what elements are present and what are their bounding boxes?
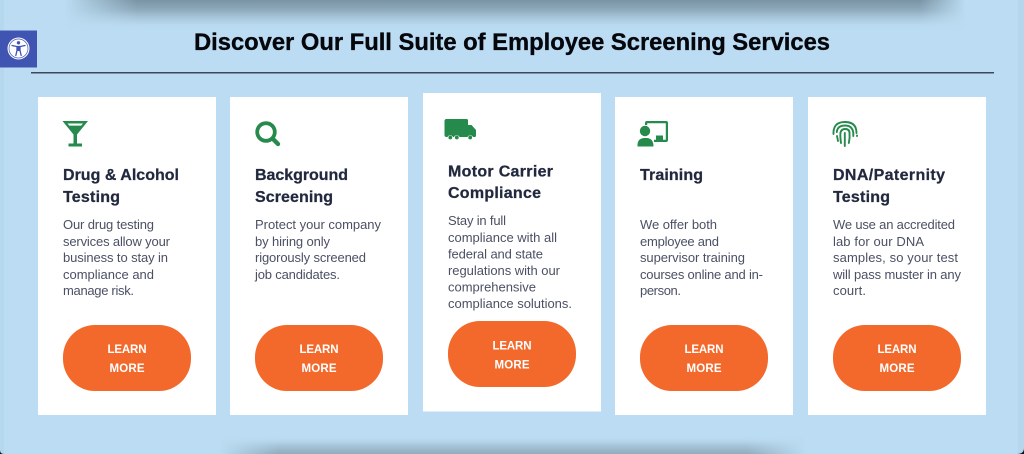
heading: Motor Carrier [448, 164, 553, 180]
button: learn more: MORE [686, 363, 722, 375]
text block: business to stay in [63, 250, 168, 265]
text block: regulations with our [448, 263, 561, 278]
panel: motor carrier compliance [423, 93, 601, 412]
button: learn more: LEARN [878, 344, 916, 356]
button: learn more: LEARN [492, 340, 532, 352]
icon: martini glass [62, 121, 88, 146]
panel: training [615, 97, 793, 415]
heading: Training [640, 167, 703, 184]
heading: Drug & Alcohol [63, 167, 179, 184]
text block: compliance solutions. [448, 296, 572, 311]
text block: court. [833, 283, 866, 298]
text block: person. [640, 283, 681, 298]
panel: background screening [230, 97, 408, 415]
heading: Screening [255, 189, 333, 206]
icon: trainer at board [637, 121, 668, 146]
text block: courses online and in- [640, 267, 763, 282]
text block: services allow your [63, 234, 171, 249]
button: learn more: MORE [302, 363, 337, 375]
button: learn more: MORE [880, 363, 915, 375]
text block: supervisor training [640, 250, 745, 265]
button: learn more [63, 325, 191, 391]
panel: dna paternity testing [808, 97, 986, 415]
text block: Stay in full [448, 213, 506, 228]
heading: Background [255, 167, 348, 184]
text block: comprehensive [448, 280, 536, 294]
text block: by hiring only [255, 234, 330, 249]
heading: Testing [833, 189, 890, 206]
text block: compliance with all [448, 230, 557, 245]
heading: Compliance [448, 185, 541, 202]
heading: Testing [63, 189, 120, 206]
text block: Our drug testing [63, 217, 154, 232]
button: learn more: LEARN [684, 344, 724, 356]
text block: will pass muster in any [832, 267, 962, 282]
text block: federal and state [448, 246, 543, 262]
button: learn more [833, 325, 961, 391]
text block: We offer both [640, 217, 717, 232]
text block: We use an accredited [833, 217, 955, 232]
button: learn more: MORE [110, 363, 145, 375]
button: learn more: LEARN [300, 344, 338, 356]
button: learn more: LEARN [108, 344, 146, 356]
button: learn more: MORE [494, 360, 530, 372]
text block: job candidates. [254, 267, 340, 282]
icon: accessibility button [0, 30, 37, 68]
button: learn more [640, 325, 768, 391]
title: Discover Our Full Suite of Employee Screening Services [194, 29, 830, 56]
button: learn more [255, 325, 383, 391]
text block: employee and [640, 234, 719, 249]
icon: fingerprint [833, 122, 857, 146]
icon: magnifying glass [257, 123, 278, 144]
text block: lab for our DNA [833, 234, 924, 249]
text block: Protect your company [255, 217, 382, 232]
icon: truck [444, 119, 476, 139]
text block: samples, so your test [833, 250, 958, 265]
text block: manage risk. [63, 283, 134, 298]
text block: rigorously screened [255, 250, 366, 265]
text block: compliance and [63, 267, 154, 282]
panel: drug and alcohol testing [38, 97, 216, 415]
heading: DNA/Paternity [833, 167, 945, 184]
button: learn more [448, 321, 576, 387]
